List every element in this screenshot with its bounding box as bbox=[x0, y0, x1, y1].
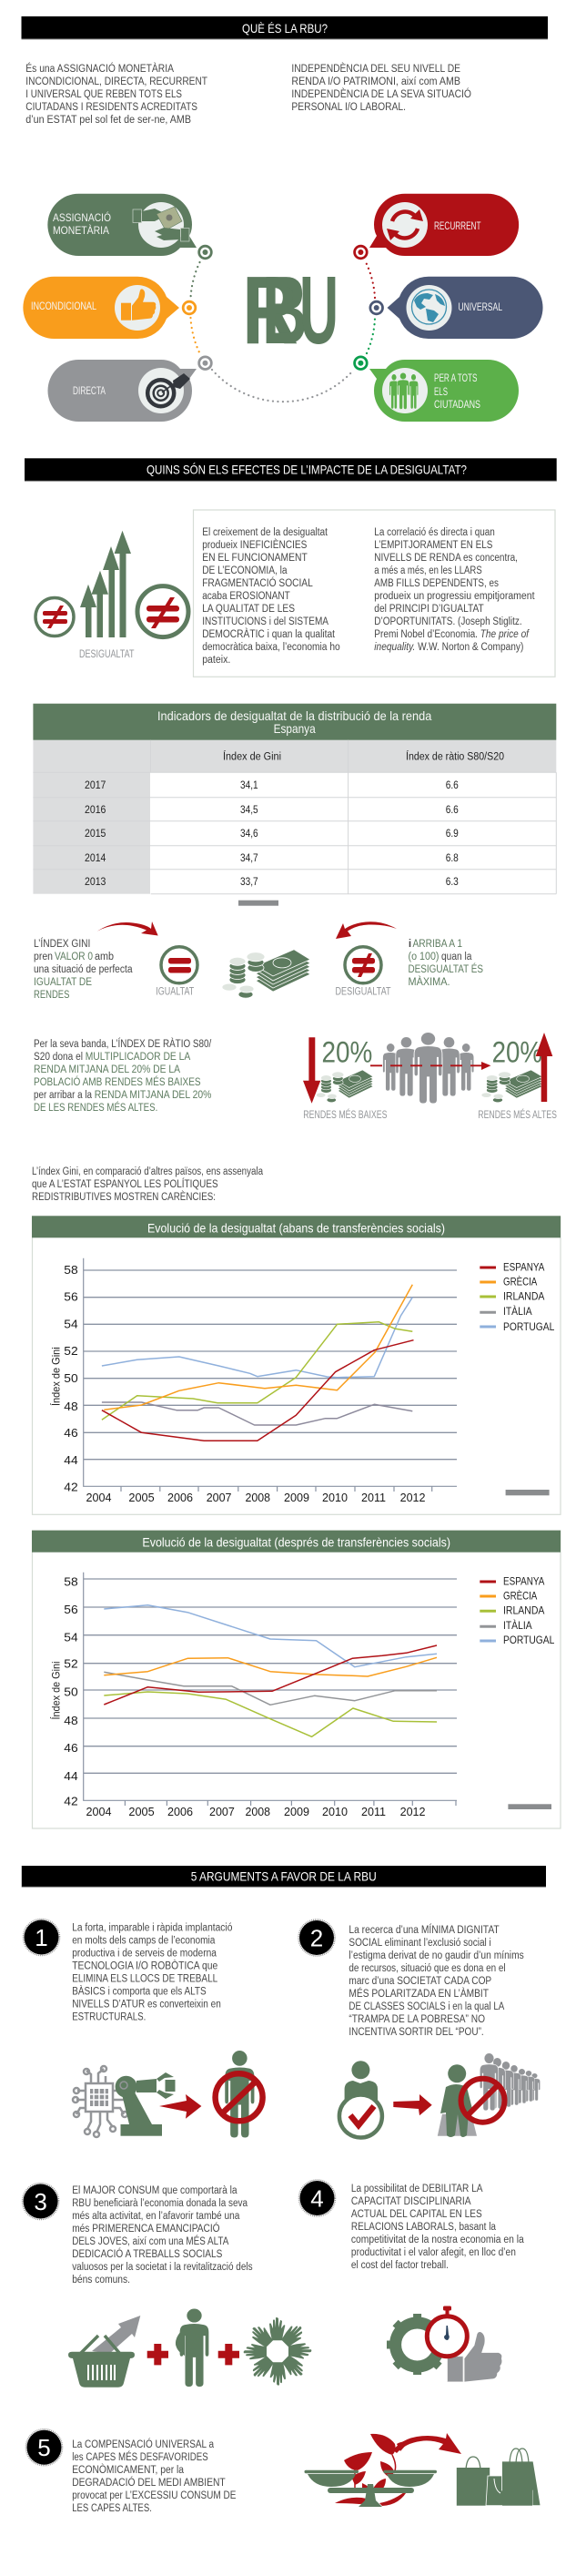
row 2013 bbox=[85, 877, 459, 888]
text: argument 2: de recursos, situació que es dona en el bbox=[349, 1963, 506, 1974]
text block: ràtio S80/S20: Per la seva banda, L’ÍNDEX DE RÀTIO S80/ bbox=[34, 1038, 212, 1050]
text: argument 5: La COMPENSACIÓ UNIVERSAL a bbox=[72, 2439, 215, 2450]
icon: queue of people bbox=[480, 2053, 541, 2111]
text column: correlació: La correlació és directa i quan bbox=[374, 527, 495, 538]
text block: definition left: I UNIVERSAL QUE REBEN TOTS ELS bbox=[25, 89, 182, 100]
bubble: directa bbox=[47, 360, 197, 422]
number badge 5: 5 bbox=[37, 2434, 51, 2461]
bubble: assignació monetària bbox=[47, 194, 197, 256]
text column: inefficiències: democràtica baixa, l’economia ho bbox=[202, 642, 340, 653]
text block: índex Gini left: L’ÍNDEX GINI bbox=[34, 938, 90, 950]
bubble: per a tots els ciutadans: ELS bbox=[434, 387, 448, 398]
illustration: richest and poorest 20% bbox=[303, 1033, 557, 1121]
section header: què és la RBU bbox=[22, 16, 548, 40]
text column: correlació: inequality. W.W. Norton & Company) bbox=[374, 642, 524, 653]
line chart: after transfers: Índex de Gini bbox=[49, 1661, 62, 1719]
text: argument 4: competitivitat de la nostra economia en la bbox=[351, 2235, 524, 2245]
legend bbox=[480, 1260, 555, 1333]
row 2015: 2015 bbox=[85, 829, 106, 840]
text column: inefficiències bbox=[202, 527, 340, 666]
text: argument 3: més alta activitat, en l’afavorir també una bbox=[72, 2211, 240, 2222]
bubble: per a tots els ciutadans: CIUTADANS bbox=[434, 400, 480, 411]
line chart: before transfers: 2010 bbox=[322, 1491, 348, 1504]
text block: chart intro: que A L’ESTAT ESPANYOL LES POLÍTIQUES bbox=[32, 1178, 218, 1190]
arrow: curved to shopping bbox=[393, 2433, 461, 2454]
text: argument 5: les CAPES MÉS DESFAVORIDES bbox=[72, 2451, 208, 2463]
logo: RBU: B bbox=[262, 257, 308, 364]
row 2015: 34,6 bbox=[240, 829, 258, 840]
text column: correlació: Premi Nobel d’Economia. The price of bbox=[374, 629, 531, 640]
line chart: before transfers: 52 bbox=[64, 1344, 78, 1358]
text block: índex Gini left: IGUALTAT DE bbox=[34, 977, 92, 988]
row 2017 bbox=[85, 780, 459, 791]
logo: RBU: U bbox=[299, 257, 339, 364]
row 2013: 6.3 bbox=[446, 877, 459, 888]
number badge 4 bbox=[298, 2180, 335, 2216]
text: argument 3: RBU beneficiarà l’economia donada la seva bbox=[72, 2198, 248, 2209]
text block: índex Gini left: una situació de perfecta bbox=[34, 964, 133, 975]
arrow: to equality bbox=[97, 921, 158, 936]
bubble: incondicional: INCONDICIONAL bbox=[31, 301, 96, 312]
text block: definition left: CIUTADANS I RESIDENTS ACREDITATS bbox=[25, 102, 197, 113]
number badge 3: 3 bbox=[34, 2188, 47, 2215]
line chart: after transfers: 2012 bbox=[400, 1805, 426, 1818]
row 2015: 6.9 bbox=[446, 829, 459, 840]
line chart: after transfers: 2007 bbox=[209, 1805, 235, 1818]
text block: ràtio S80/S20: per arribar a la bbox=[34, 1090, 93, 1101]
line chart: after transfers: 52 bbox=[64, 1657, 78, 1671]
text block: ràtio S80/S20: RENDA MITJANA DEL 20% DE LA bbox=[34, 1064, 180, 1075]
icon: plus bbox=[147, 2344, 168, 2365]
text: argument 3: béns comuns. bbox=[72, 2275, 130, 2286]
number badge 2 bbox=[298, 1919, 335, 1956]
row 2016: 34,5 bbox=[240, 805, 258, 816]
line chart: before transfers: 2008 bbox=[246, 1491, 270, 1504]
text column: correlació: D’OPORTUNITATS. (Joseph Stiglitz. bbox=[374, 616, 522, 627]
line chart: before transfers: 56 bbox=[64, 1290, 78, 1304]
row 2017: 2017 bbox=[85, 780, 106, 791]
text: argument 4: productivitat i el valor afegit, en lloc d’en bbox=[351, 2247, 516, 2258]
line chart: after transfers: 2011 bbox=[361, 1805, 386, 1818]
text: argument 2: MÉS POLARITZADA EN L’ÀMBIT bbox=[349, 1988, 489, 2000]
legend: ESPANYA bbox=[503, 1260, 544, 1273]
text: argument 2: “TRAMPA DE LA POBRESA” NO bbox=[349, 2014, 485, 2025]
text: argument 2: DE CLASSES SOCIALS i en la qual LA bbox=[349, 2001, 505, 2012]
line chart: before transfers: 44 bbox=[64, 1453, 78, 1467]
text block: ràtio S80/S20: DE LES RENDES MÉS ALTES. bbox=[34, 1102, 157, 1114]
argument 5 bbox=[25, 2429, 541, 2514]
text: argument 3 bbox=[72, 2185, 253, 2286]
bubble: per a tots els ciutadans: PER A TOTS bbox=[434, 373, 478, 384]
group: people bbox=[383, 1033, 474, 1104]
bubble: per a tots els ciutadans bbox=[369, 360, 519, 422]
text column: inefficiències: DEMOCRÀTIC i quan la qualitat bbox=[202, 628, 336, 640]
text: argument 1: BÀSICS i comporta que els ALTS bbox=[72, 1986, 207, 1998]
text: argument 4: el cost del factor treball. bbox=[351, 2260, 449, 2271]
text: argument 1: La forta, imparable i ràpida implantació bbox=[72, 1923, 232, 1934]
text column: inefficiències: DE L’ECONOMIA, la bbox=[202, 565, 288, 576]
arrow: lower incomes bbox=[317, 1070, 373, 1103]
text block: definition left: INCONDICIONAL, DIRECTA, RECURRENT bbox=[25, 76, 207, 87]
line chart: before transfers: 2012 bbox=[400, 1491, 426, 1504]
legend: PORTUGAL bbox=[503, 1320, 555, 1333]
line chart: before transfers: 54 bbox=[64, 1317, 78, 1330]
text: argument 2 bbox=[349, 1924, 524, 2038]
table: indicators of inequality: Espanya bbox=[274, 721, 316, 736]
line chart: before transfers: 2005 bbox=[128, 1491, 155, 1504]
text column: correlació: AMB FILLS DEPENDENTS, es bbox=[374, 578, 499, 589]
line chart: after transfers: 46 bbox=[64, 1741, 78, 1755]
panel: chart before transfers bbox=[32, 1216, 561, 1514]
line chart: after transfers: 48 bbox=[64, 1714, 78, 1727]
text: argument 1 bbox=[72, 1923, 232, 2023]
text: argument 2: l’estigma derivat de no gaudir d’un mínims bbox=[349, 1950, 524, 1961]
bubble: universal bbox=[388, 277, 543, 339]
text block: índex Gini right: DESIGUALTAT ÉS bbox=[408, 963, 483, 975]
bubble: recurrent: RECURRENT bbox=[434, 221, 480, 232]
number badge 5 bbox=[25, 2429, 62, 2466]
text: argument 4: La possibilitat de DEBILITAR LA bbox=[351, 2184, 483, 2194]
text block: definition right: PERSONAL I/O LABORAL. bbox=[291, 102, 406, 113]
icon: seated person prohibited bbox=[438, 2064, 504, 2137]
bubble: universal: UNIVERSAL bbox=[458, 302, 502, 313]
text: argument 3: DEDICACIÓ A TREBALLS SOCIALS bbox=[72, 2248, 223, 2260]
icon: prohibited worker bbox=[216, 2051, 263, 2138]
text column: inefficiències: INSTITUCIONS i del SISTEMA bbox=[202, 616, 328, 627]
text block: ràtio S80/S20: MULTIPLICADOR DE LA bbox=[86, 1052, 191, 1063]
line chart: before transfers: 50 bbox=[64, 1371, 78, 1385]
text block: chart intro bbox=[32, 1166, 264, 1203]
text: argument 5: ECONÒMICAMENT, per la bbox=[72, 2464, 185, 2476]
text block: chart intro: L’índex Gini, en comparació d’altres països, ens assenyala bbox=[32, 1166, 264, 1177]
icon: equality sign bbox=[156, 947, 197, 998]
text: argument 1: ELIMINA ELS LLOCS DE TREBALL bbox=[72, 1974, 218, 1985]
icon: basket with arrow bbox=[68, 2316, 140, 2388]
table: indicators of inequality: Índex de ràtio S80/S20 bbox=[406, 751, 504, 763]
text: argument 4: ACTUAL DEL CAPITAL EN LES bbox=[351, 2209, 482, 2220]
bubble: incondicional bbox=[23, 277, 179, 339]
section header: efectes de la desigualtat: QUINS SÓN ELS EFECTES DE L’IMPACTE DE LA DESIGUALTAT? bbox=[147, 463, 467, 477]
dotted connectors bbox=[191, 262, 375, 402]
panel: chart after transfers bbox=[32, 1531, 561, 1828]
line chart: after transfers: 2006 bbox=[167, 1805, 193, 1818]
line chart: before transfers: 2007 bbox=[207, 1491, 231, 1504]
table: indicators of inequality bbox=[33, 704, 556, 894]
arrow: higher incomes bbox=[481, 1070, 542, 1103]
legend: ESPANYA bbox=[503, 1575, 544, 1588]
line chart: before transfers: 2004 bbox=[86, 1491, 111, 1504]
text block: índex Gini right: (o 100) bbox=[408, 952, 440, 962]
text column: inefficiències: produeix INEFICIÈNCIES bbox=[202, 539, 308, 551]
text: argument 3: DELS JOVES, així com una MÉS ALTA bbox=[72, 2235, 229, 2247]
row 2016: 2016 bbox=[85, 805, 106, 816]
text column: inefficiències: EN EL FUNCIONAMENT bbox=[202, 553, 308, 564]
line chart: after transfers: 56 bbox=[64, 1603, 78, 1616]
text: argument 4: CAPACITAT DISCIPLINARIA bbox=[351, 2196, 471, 2207]
icon: inequality sign: DESIGUALTAT bbox=[335, 987, 391, 998]
argument 1 bbox=[24, 1919, 263, 2138]
row 2015 bbox=[85, 829, 459, 840]
line chart: after transfers: 2008 bbox=[246, 1805, 270, 1818]
section header: què és la RBU: QUÈ ÉS LA RBU? bbox=[242, 21, 328, 36]
text block: índex Gini left bbox=[34, 938, 133, 1001]
row 2017: 34,1 bbox=[240, 780, 258, 791]
text column: inefficiències: LA QUALITAT DE LES bbox=[202, 604, 295, 615]
line chart: after transfers: 50 bbox=[64, 1685, 78, 1698]
line chart: before transfers: 46 bbox=[64, 1426, 78, 1440]
text column: correlació bbox=[374, 527, 535, 653]
text block: ràtio S80/S20 bbox=[34, 1038, 212, 1114]
legend bbox=[480, 1575, 555, 1646]
line chart: before transfers: 2009 bbox=[284, 1491, 309, 1504]
text: argument 3: valuosos per la societat i la revitalització dels bbox=[72, 2262, 253, 2273]
arrow: to inequality bbox=[336, 921, 397, 939]
icon: equality sign: IGUALTAT bbox=[156, 987, 194, 998]
text column: inefficiències: FRAGMENTACIÓ SOCIAL bbox=[202, 577, 313, 589]
icon: growing inequality arrows: DESIGUALTAT bbox=[79, 649, 135, 660]
section header: 5 arguments bbox=[22, 1866, 546, 1888]
row 2016: 6.6 bbox=[446, 805, 459, 816]
number badge 1 bbox=[24, 1919, 60, 1956]
bubble: recurrent bbox=[369, 194, 519, 256]
line chart: before transfers: 2006 bbox=[167, 1491, 193, 1504]
row 2014: 6.8 bbox=[446, 853, 459, 864]
line chart: after transfers bbox=[49, 1573, 457, 1818]
text column: correlació: produeix un progressiu empitjorament bbox=[374, 591, 535, 602]
illustration: richest and poorest 20%: RENDES MÉS BAIXES bbox=[303, 1109, 388, 1121]
line chart: before transfers: 2011 bbox=[361, 1491, 386, 1504]
bubble: directa: DIRECTA bbox=[73, 386, 106, 397]
legend: GRÈCIA bbox=[503, 1588, 537, 1603]
text: argument 3: més PRIMERENCA EMANCIPACIÓ bbox=[72, 2223, 220, 2235]
row 2014 bbox=[85, 853, 459, 864]
text: argument 4 bbox=[351, 2184, 524, 2271]
row 2013: 2013 bbox=[85, 877, 106, 888]
text block: definition left bbox=[25, 63, 207, 126]
row 2014: 2014 bbox=[85, 853, 106, 864]
row 2013: 33,7 bbox=[240, 877, 258, 888]
section header: efectes de la desigualtat bbox=[25, 458, 557, 482]
text: argument 5: DEGRADACIÓ DEL MEDI AMBIENT bbox=[72, 2477, 226, 2489]
arrow bbox=[393, 2094, 432, 2115]
text: argument 4: RELACIONS LABORALS, basant la bbox=[351, 2222, 497, 2233]
icon: robot and chip bbox=[73, 2066, 175, 2137]
text block: índex Gini left: VALOR 0 bbox=[55, 952, 93, 962]
legend: ITÀLIA bbox=[503, 1304, 532, 1318]
panel: impact text bbox=[193, 510, 555, 677]
text column: correlació: L’EMPITJORAMENT EN ELS bbox=[374, 540, 493, 551]
text: argument 5 bbox=[72, 2439, 237, 2514]
nodes on the arc bbox=[183, 246, 383, 370]
panel: chart before transfers: Evolució de la desigualtat (abans de transferències socials) bbox=[147, 1220, 445, 1235]
legend: ITÀLIA bbox=[503, 1618, 532, 1632]
icon: ring of hands bbox=[244, 2317, 311, 2386]
legend: GRÈCIA bbox=[503, 1275, 537, 1288]
text column: inefficiències: pateix. bbox=[202, 655, 230, 666]
table: indicators of inequality: Indicadors de desigualtat de la distribució de la renda bbox=[157, 708, 431, 723]
line chart: before transfers bbox=[49, 1258, 457, 1504]
text block: índex Gini left: amb bbox=[95, 952, 114, 962]
text column: inefficiències: acaba EROSIONANT bbox=[202, 591, 290, 602]
icon: growing inequality arrows bbox=[35, 531, 188, 660]
section header: 5 arguments: 5 ARGUMENTS A FAVOR DE LA RBU bbox=[191, 1869, 377, 1884]
line chart: before transfers: 42 bbox=[64, 1481, 78, 1494]
icon: plus bbox=[218, 2344, 239, 2365]
text column: correlació: del PRINCIPI D’IGUALTAT bbox=[374, 604, 484, 615]
argument 3 bbox=[23, 2184, 311, 2388]
text block: índex Gini left: RENDES bbox=[34, 990, 70, 1001]
text block: índex Gini left: pren bbox=[34, 952, 53, 962]
icon: person with check bbox=[339, 2061, 382, 2138]
arrow bbox=[159, 2094, 201, 2119]
number badge 3 bbox=[23, 2184, 59, 2220]
row 2016 bbox=[85, 805, 459, 816]
text block: definition right: INDEPENDÈNCIA DE LA SEVA SITUACIÓ bbox=[291, 88, 471, 100]
logo: RBU: R bbox=[242, 257, 298, 364]
line chart: after transfers: 2004 bbox=[86, 1805, 111, 1818]
line chart: after transfers: 58 bbox=[64, 1575, 78, 1589]
line chart: after transfers: 2009 bbox=[284, 1805, 309, 1818]
line chart: before transfers: 48 bbox=[64, 1400, 78, 1413]
text block: definition right bbox=[291, 63, 471, 113]
table: indicators of inequality: Índex de Gini bbox=[223, 751, 281, 763]
number badge 1: 1 bbox=[35, 1924, 48, 1951]
legend: PORTUGAL bbox=[503, 1634, 555, 1646]
text: argument 1: ESTRUCTURALS. bbox=[72, 2012, 146, 2023]
text column: correlació: a més a més, en les LLARS bbox=[374, 565, 482, 576]
text block: índex Gini right: i bbox=[408, 939, 411, 950]
text: argument 2: La recerca d’una MÍNIMA DIGNITAT bbox=[349, 1924, 500, 1936]
icon: money bbox=[222, 950, 310, 998]
bubble: assignació monetària: ASSIGNACIÓ bbox=[53, 212, 111, 224]
line chart: after transfers: 44 bbox=[64, 1769, 78, 1783]
text block: ràtio S80/S20: POBLACIÓ AMB RENDES MÉS BAIXES bbox=[34, 1076, 201, 1088]
legend: IRLANDA bbox=[503, 1290, 544, 1303]
text column: inefficiències: El creixement de la desigualtat bbox=[202, 527, 328, 538]
text: argument 2: SOCIAL eliminant l’exclusió social i bbox=[349, 1938, 491, 1949]
text block: índex Gini right: quan la bbox=[441, 952, 472, 962]
text block: ràtio S80/S20: RENDA MITJANA DEL 20% bbox=[95, 1090, 211, 1101]
line chart: before transfers: 58 bbox=[64, 1263, 78, 1277]
text block: definition right: RENDA I/O PATRIMONI, així com AMB bbox=[291, 76, 460, 87]
text block: definition right: INDEPENDÈNCIA DEL SEU NIVELL DE bbox=[291, 63, 460, 75]
diagram: RBU features bbox=[23, 194, 543, 422]
panel: chart after transfers: Evolució de la desigualtat (després de transferències socials) bbox=[142, 1534, 450, 1549]
text: argument 5: LES CAPES ALTES. bbox=[72, 2503, 152, 2514]
text: argument 2: INCENTIVA SORTIR DEL “POU”. bbox=[349, 2027, 484, 2038]
text: argument 5: provocat per L’EXCESSIU CONSUM DE bbox=[72, 2490, 237, 2501]
icon: gear, stopwatch and thumb bbox=[387, 2306, 502, 2382]
icon: shopping bags bbox=[457, 2449, 541, 2506]
legend: IRLANDA bbox=[503, 1604, 544, 1617]
text: argument 2: marc d’una SOCIETAT CADA COP bbox=[349, 1976, 491, 1987]
text block: definition left: d’un ESTAT pel sol fet de ser-ne, AMB bbox=[25, 115, 191, 126]
text: argument 1: productiva i de serveis de moderna bbox=[72, 1949, 217, 1960]
illustration: richest and poorest 20%: 20% bbox=[492, 1036, 542, 1069]
number badge 4: 4 bbox=[310, 2185, 324, 2213]
line chart: after transfers: 2010 bbox=[322, 1805, 348, 1818]
text block: chart intro: REDISTRIBUTIVES MOSTREN CARÈNCIES: bbox=[32, 1191, 216, 1203]
line chart: after transfers: 2005 bbox=[128, 1805, 155, 1818]
line chart: before transfers: Índex de Gini bbox=[49, 1347, 62, 1406]
source marker bbox=[238, 901, 278, 906]
icon: inequality sign bbox=[335, 947, 391, 998]
text block: índex Gini right bbox=[408, 939, 483, 988]
argument 4 bbox=[298, 2180, 524, 2382]
text block: ràtio S80/S20: S20 dona el bbox=[34, 1052, 83, 1063]
line chart: after transfers: 54 bbox=[64, 1631, 78, 1644]
text: argument 3: El MAJOR CONSUM que comportarà la bbox=[72, 2185, 237, 2196]
bubble: assignació monetària: MONETÀRIA bbox=[53, 225, 109, 237]
illustration: richest and poorest 20%: 20% bbox=[322, 1036, 372, 1069]
text block: índex Gini right: MÀXIMA. bbox=[408, 976, 450, 988]
line chart: after transfers: 42 bbox=[64, 1795, 78, 1808]
text: argument 1: en molts dels camps de l’economia bbox=[72, 1936, 216, 1947]
row 2017: 6.6 bbox=[446, 780, 459, 791]
text column: correlació: NIVELLS DE RENDA es concentra, bbox=[374, 553, 518, 564]
text: argument 1: NIVELLS D’ATUR es converteixin en bbox=[72, 2000, 221, 2011]
row 2014: 34,7 bbox=[240, 853, 258, 864]
icon: young person bbox=[176, 2309, 209, 2388]
text: argument 1: TECNOLOGIA I/O ROBÒTICA que bbox=[72, 1960, 217, 1972]
icon: plants and balance bbox=[304, 2434, 437, 2507]
number badge 2: 2 bbox=[310, 1925, 323, 1952]
argument 2 bbox=[298, 1919, 541, 2138]
text block: definition left: És una ASSIGNACIÓ MONETÀRIA bbox=[25, 63, 174, 75]
text block: índex Gini right: ARRIBA A 1 bbox=[413, 939, 462, 950]
